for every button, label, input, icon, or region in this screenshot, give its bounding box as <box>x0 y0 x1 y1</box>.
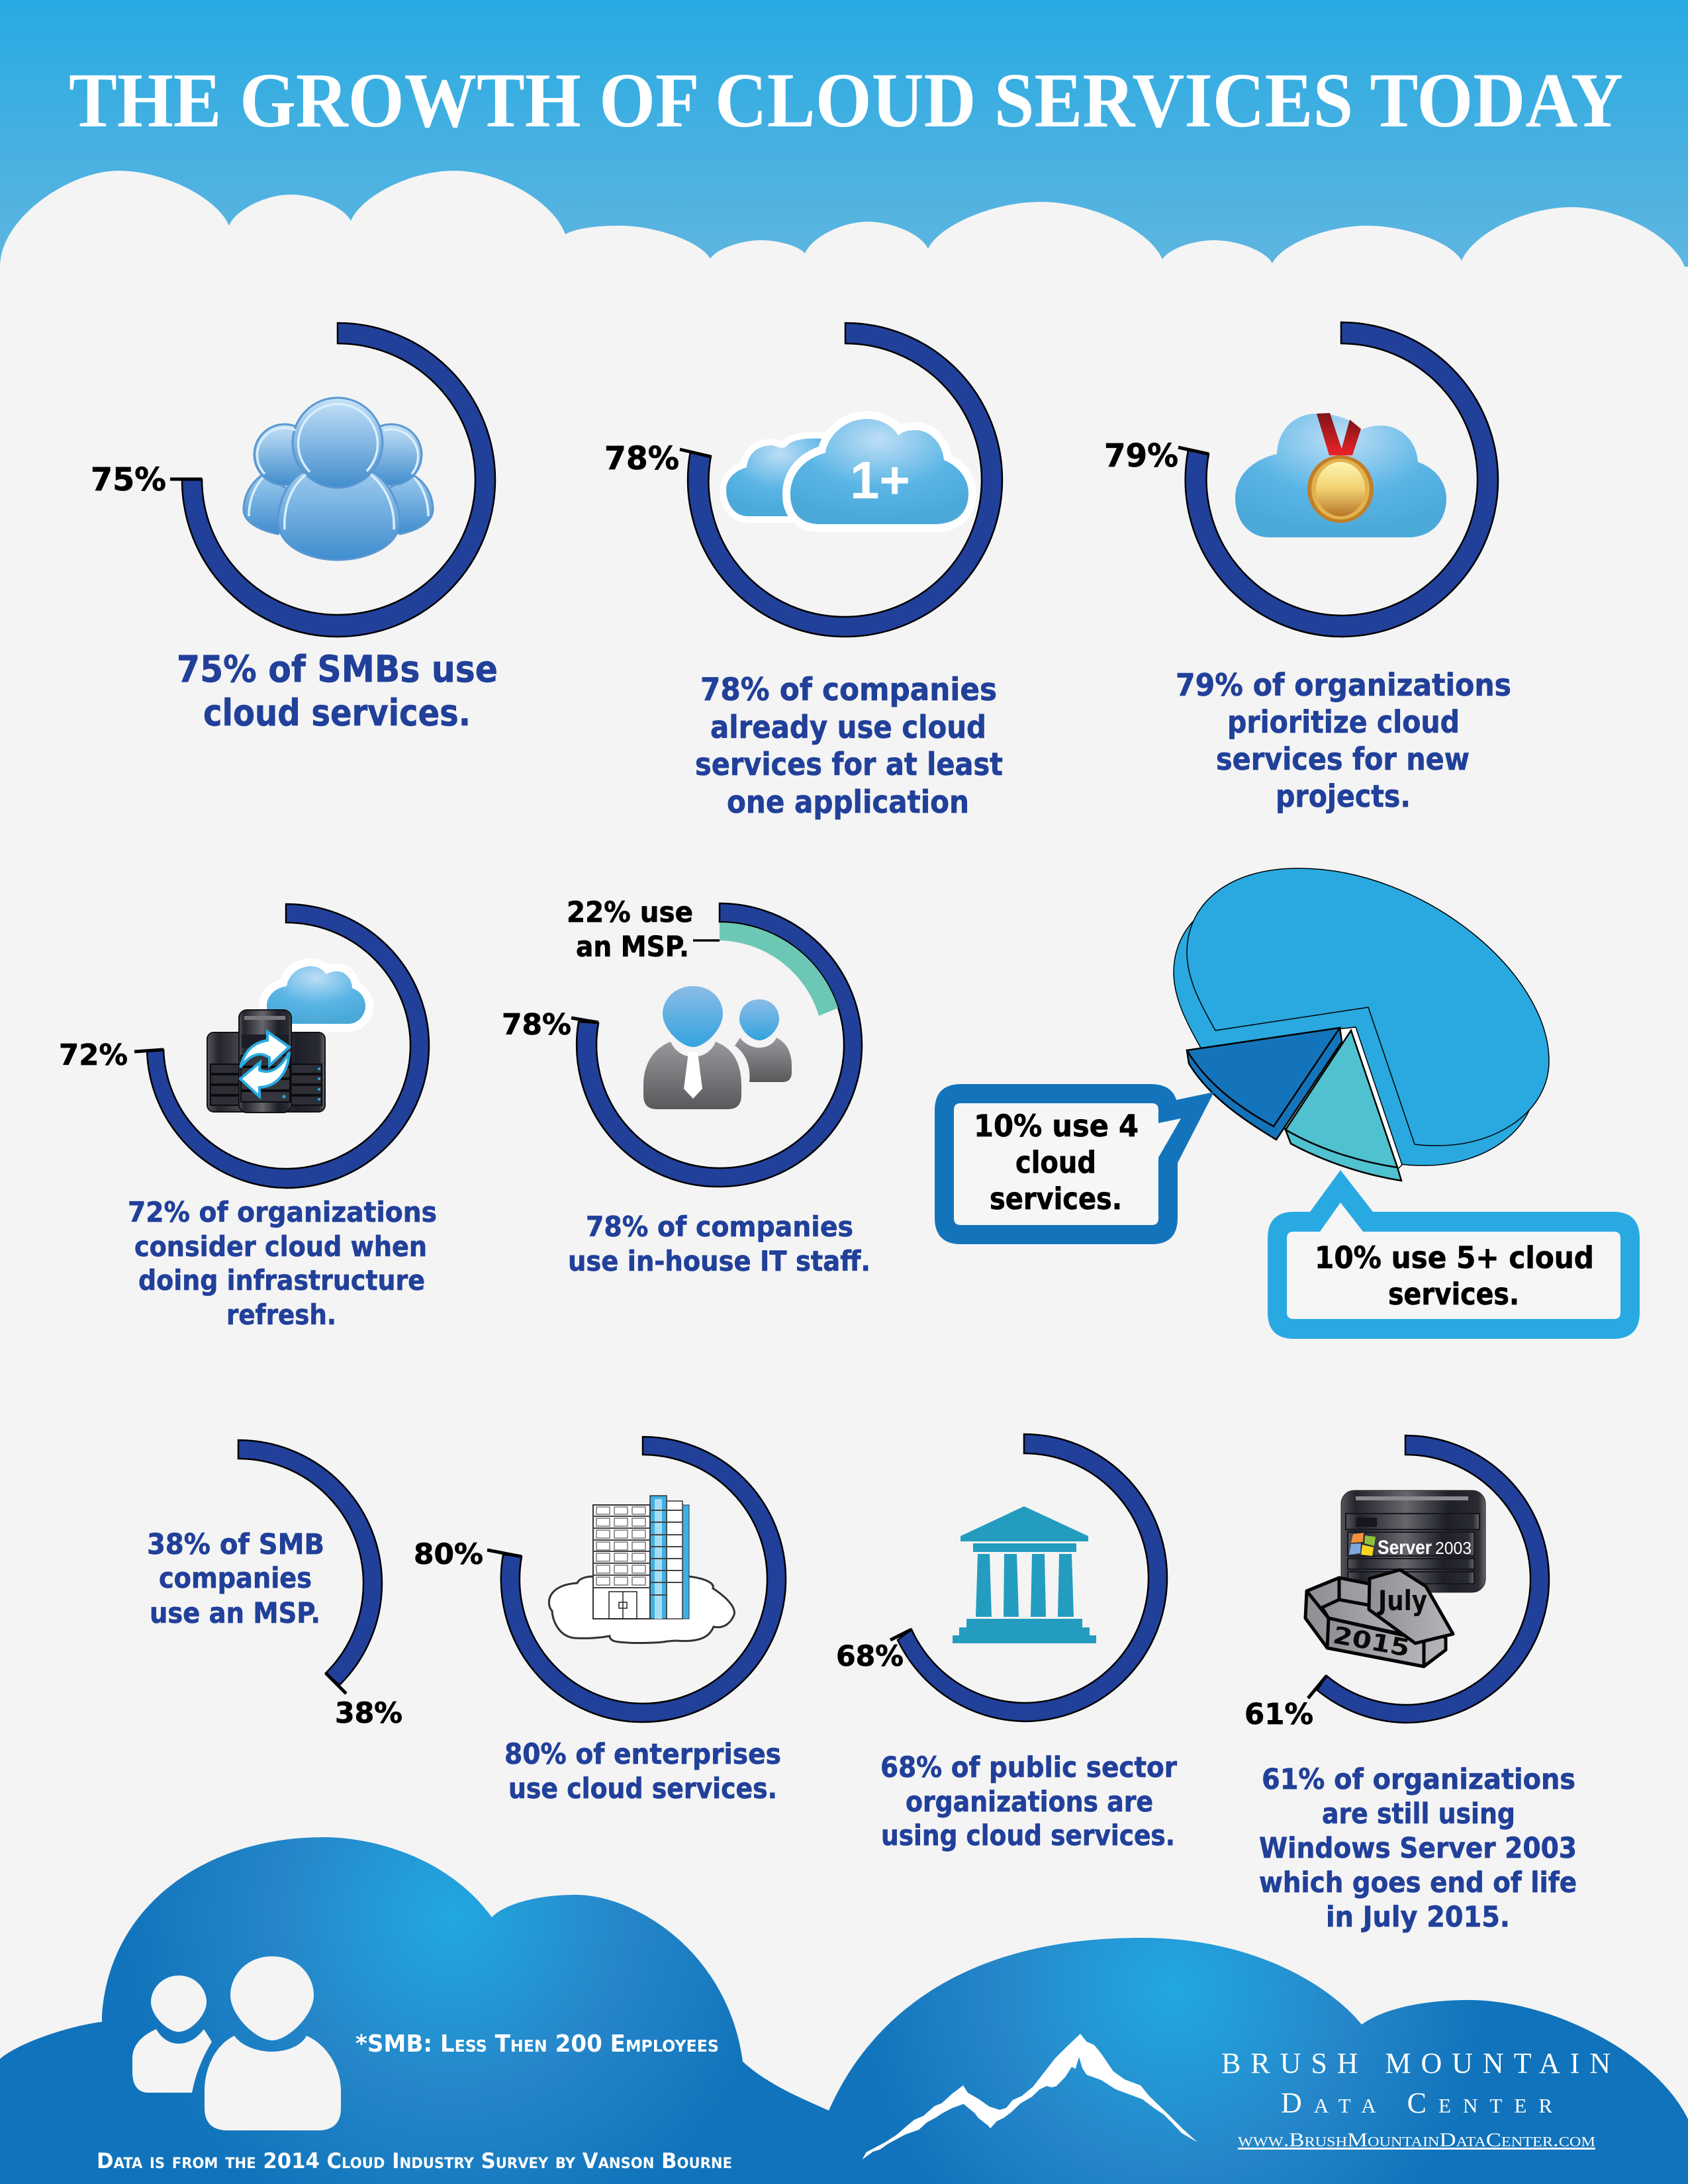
value 68%: 68% <box>836 1640 904 1673</box>
icon: coffin July 2015 <box>1305 1570 1453 1666</box>
caption 61%: in July 2015. <box>1326 1901 1510 1934</box>
caption 38%: use an MSP. <box>150 1597 320 1630</box>
source note: Data is from the 2014 Cloud Industry Survey by Vanson Bourne <box>97 2148 732 2173</box>
white gap between slices <box>1284 1027 1402 1169</box>
ring 68% <box>898 1434 1167 1721</box>
panel: 38% of SMB companies <box>147 1440 402 1730</box>
ring 38% <box>238 1440 382 1685</box>
caption 79%: services for new <box>1216 741 1470 777</box>
value 80%: 80% <box>414 1538 483 1571</box>
caption 61%: Windows Server 2003 <box>1259 1832 1577 1865</box>
pie chart: number of cloud services <box>1174 868 1549 1181</box>
caption 72%: doing infrastructure <box>138 1264 425 1297</box>
value 78% in-house: 78% <box>502 1008 571 1042</box>
caption 79% <box>1176 667 1511 814</box>
icon: IT staff people <box>643 986 792 1109</box>
callout: 10% use 5+ cloud services: services. <box>1388 1277 1519 1312</box>
brand name: BRUSH MOUNTAIN <box>1221 2047 1611 2079</box>
caption 75%: cloud services. <box>203 692 471 734</box>
tick 22% <box>693 939 720 942</box>
ring 79% <box>1186 322 1498 637</box>
caption 79%: 79% of organizations <box>1176 667 1511 703</box>
pie slice: 4 services <box>1187 1028 1342 1140</box>
caption 79%: projects. <box>1276 778 1411 814</box>
label 22% use an MSP: 22% use <box>567 896 693 929</box>
caption 61%: which goes end of life <box>1259 1866 1577 1899</box>
tick 61% <box>1308 1676 1327 1698</box>
panel: 72% of organizations <box>59 904 437 1331</box>
caption 68% <box>880 1751 1178 1852</box>
panel: 75% of SMBs <box>91 323 498 734</box>
callout: 10% use 4 cloud services: services. <box>990 1181 1122 1216</box>
caption 61%: are still using <box>1322 1797 1515 1831</box>
caption 72%: consider cloud when <box>134 1230 427 1263</box>
ring 78% <box>688 323 1002 637</box>
caption 78% <box>695 672 1003 821</box>
ring 80% <box>501 1437 786 1722</box>
callout: 10% use 5+ cloud services <box>1268 1170 1640 1339</box>
value 78%: 78% <box>604 440 679 477</box>
callout: 10% use 5+ cloud services: 10% use 5+ cloud <box>1315 1240 1594 1275</box>
label 22% use an MSP <box>567 896 693 964</box>
caption 78% in-house <box>568 1210 870 1277</box>
label 22% use an MSP: an MSP. <box>576 931 689 964</box>
ring 75% <box>182 323 495 637</box>
panel: 80% of enterprises <box>414 1437 786 1805</box>
caption 78% in-house: use in-house IT staff. <box>568 1245 870 1277</box>
icon: cloud with medal <box>1235 413 1446 537</box>
icon: coffin July 2015: 2015 <box>1331 1622 1412 1662</box>
panel: bottom right cloud with logo <box>829 1938 1688 2184</box>
panel: 68% of public sector <box>836 1434 1178 1852</box>
caption 38%: 38% of SMB <box>147 1528 324 1561</box>
caption 78%: 78% of companies <box>700 672 997 708</box>
caption 38%: companies <box>159 1562 312 1595</box>
caption 80% <box>504 1738 781 1805</box>
caption 75%: 75% of SMBs use <box>177 648 498 690</box>
caption 61%: 61% of organizations <box>1262 1763 1575 1796</box>
panel: 79% of organizations <box>1104 322 1511 814</box>
icon: mountain logo <box>862 2034 1197 2160</box>
callout: 10% use 4 cloud services <box>935 1084 1214 1244</box>
icon: two clouds with 1+: 1+ <box>850 451 910 510</box>
caption 78%: already use cloud <box>710 709 986 746</box>
cloud shape left <box>0 1837 835 2184</box>
icon: two clouds with 1+ <box>726 419 968 524</box>
icon: group of people <box>244 398 433 560</box>
value 79%: 79% <box>1104 437 1178 475</box>
ring 72% <box>147 904 429 1188</box>
ring 61% <box>1317 1435 1549 1723</box>
panel: 61% still using Windows Server 2003 <box>1244 1435 1577 1934</box>
value 72%: 72% <box>59 1038 128 1072</box>
icon: coffin July 2015: July <box>1376 1584 1427 1617</box>
cloud shape right <box>829 1938 1688 2184</box>
icon: Windows Server 2003 box <box>1341 1490 1485 1592</box>
callout: 10% use 4 cloud services: 10% use 4 <box>974 1109 1139 1144</box>
header sky band with cloud edge <box>0 0 1688 298</box>
caption 68%: organizations are <box>906 1786 1153 1819</box>
caption 78% in-house: 78% of companies <box>586 1210 853 1243</box>
tick 38% <box>326 1673 346 1694</box>
icon: government building <box>953 1506 1096 1643</box>
note: SMB definition: *SMB: Less Then 200 Employees <box>355 2030 719 2058</box>
caption 72% <box>128 1196 437 1331</box>
pie slice: 5+ services <box>1286 1030 1401 1181</box>
brand subtitle: Data Center <box>1281 2087 1552 2119</box>
caption 78%: services for at least <box>695 747 1003 783</box>
caption 80%: 80% of enterprises <box>504 1738 781 1771</box>
caption 79%: prioritize cloud <box>1227 704 1460 740</box>
icon: two people silhouettes <box>132 1956 341 2130</box>
icon: servers syncing to cloud <box>207 966 365 1113</box>
icon: building on cloud <box>549 1496 734 1643</box>
tick 78% in-house <box>571 1018 598 1023</box>
panel: 78% in-house IT staff <box>502 896 870 1277</box>
value 38%: 38% <box>335 1697 402 1730</box>
icon: Windows Server 2003 box: 2003 <box>1435 1538 1472 1558</box>
pie slice: remainder side <box>1174 888 1536 1165</box>
caption 61% <box>1259 1763 1577 1934</box>
caption 68%: 68% of public sector <box>880 1751 1178 1784</box>
icon: Windows Server 2003 box: Server <box>1378 1537 1432 1559</box>
tick 68% <box>890 1629 912 1640</box>
value 61%: 61% <box>1244 1698 1313 1731</box>
caption 75% <box>177 648 498 734</box>
tick 78% <box>680 449 711 457</box>
caption 68%: using cloud services. <box>881 1819 1175 1852</box>
caption 38% <box>147 1528 324 1630</box>
teal segment 22% <box>720 923 838 1016</box>
value 75%: 75% <box>91 461 166 498</box>
tick 79% <box>1178 447 1209 454</box>
caption 72%: refresh. <box>226 1298 336 1331</box>
tick 80% <box>487 1550 522 1557</box>
tick 75% <box>170 478 202 480</box>
ring 78% in-house <box>577 903 862 1187</box>
caption 80%: use cloud services. <box>508 1772 777 1805</box>
panel: bottom left cloud <box>0 1837 835 2184</box>
caption 72%: 72% of organizations <box>128 1196 437 1228</box>
callout: 10% use 4 cloud services: cloud <box>1015 1145 1096 1180</box>
panel: 78% of companies <box>604 323 1003 821</box>
website url: www.BrushMountainDataCenter.com <box>1238 2129 1595 2151</box>
tick 72% <box>134 1050 164 1052</box>
pie slice: remainder top <box>1187 868 1549 1146</box>
caption 78%: one application <box>727 784 969 821</box>
